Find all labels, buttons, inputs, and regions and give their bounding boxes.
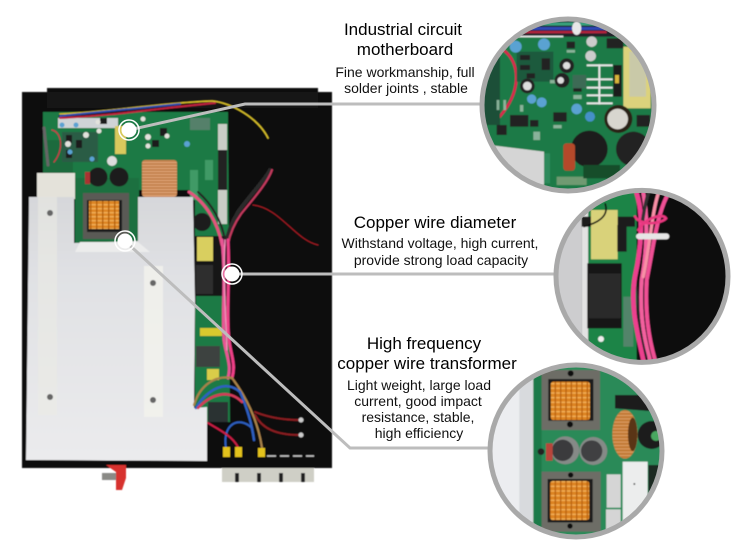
dot: copper wire: [222, 264, 242, 284]
dot: transformer: [115, 231, 135, 251]
heading: motherboard: Industrial circuit: [344, 20, 462, 39]
black case: [22, 88, 332, 468]
wire harness: [44, 101, 318, 378]
description: transformer: resistance, stable,: [362, 409, 474, 425]
heading: transformer: copper wire transformer: [337, 354, 517, 373]
detail circle: transformer: [487, 362, 667, 542]
description: motherboard: solder joints , stable: [344, 80, 468, 96]
description: transformer: Light weight, large load: [347, 377, 491, 393]
product photo: open inverter case: [22, 88, 332, 490]
lower board and terminals: [102, 328, 314, 490]
line to copper wire: [232, 272, 556, 276]
description: transformer: high efficiency: [375, 425, 463, 441]
description: motherboard: Fine workmanship, full: [335, 64, 475, 80]
circuit board: [43, 112, 230, 422]
detail circle: copper wire: [553, 187, 733, 367]
line to motherboard: [129, 104, 482, 130]
line to transformer: [125, 241, 490, 448]
description: transformer: current, good impact: [354, 393, 482, 409]
callout lines: [125, 104, 556, 448]
heading: copper wire: Copper wire diameter: [354, 213, 517, 232]
white insulation paper: [26, 173, 207, 461]
heading: transformer: High frequency: [367, 334, 482, 353]
description: copper wire: Withstand voltage, high current,: [342, 235, 538, 251]
detail circle: motherboard: [480, 18, 657, 195]
description: copper wire: provide strong load capacity: [354, 252, 528, 268]
heading: motherboard: motherboard: [357, 40, 453, 59]
text block: copper wire: [342, 213, 538, 268]
dot: motherboard: [119, 120, 139, 140]
text block: transformer: [337, 334, 517, 441]
text block: motherboard: [335, 20, 475, 96]
marker dots: [115, 120, 242, 284]
